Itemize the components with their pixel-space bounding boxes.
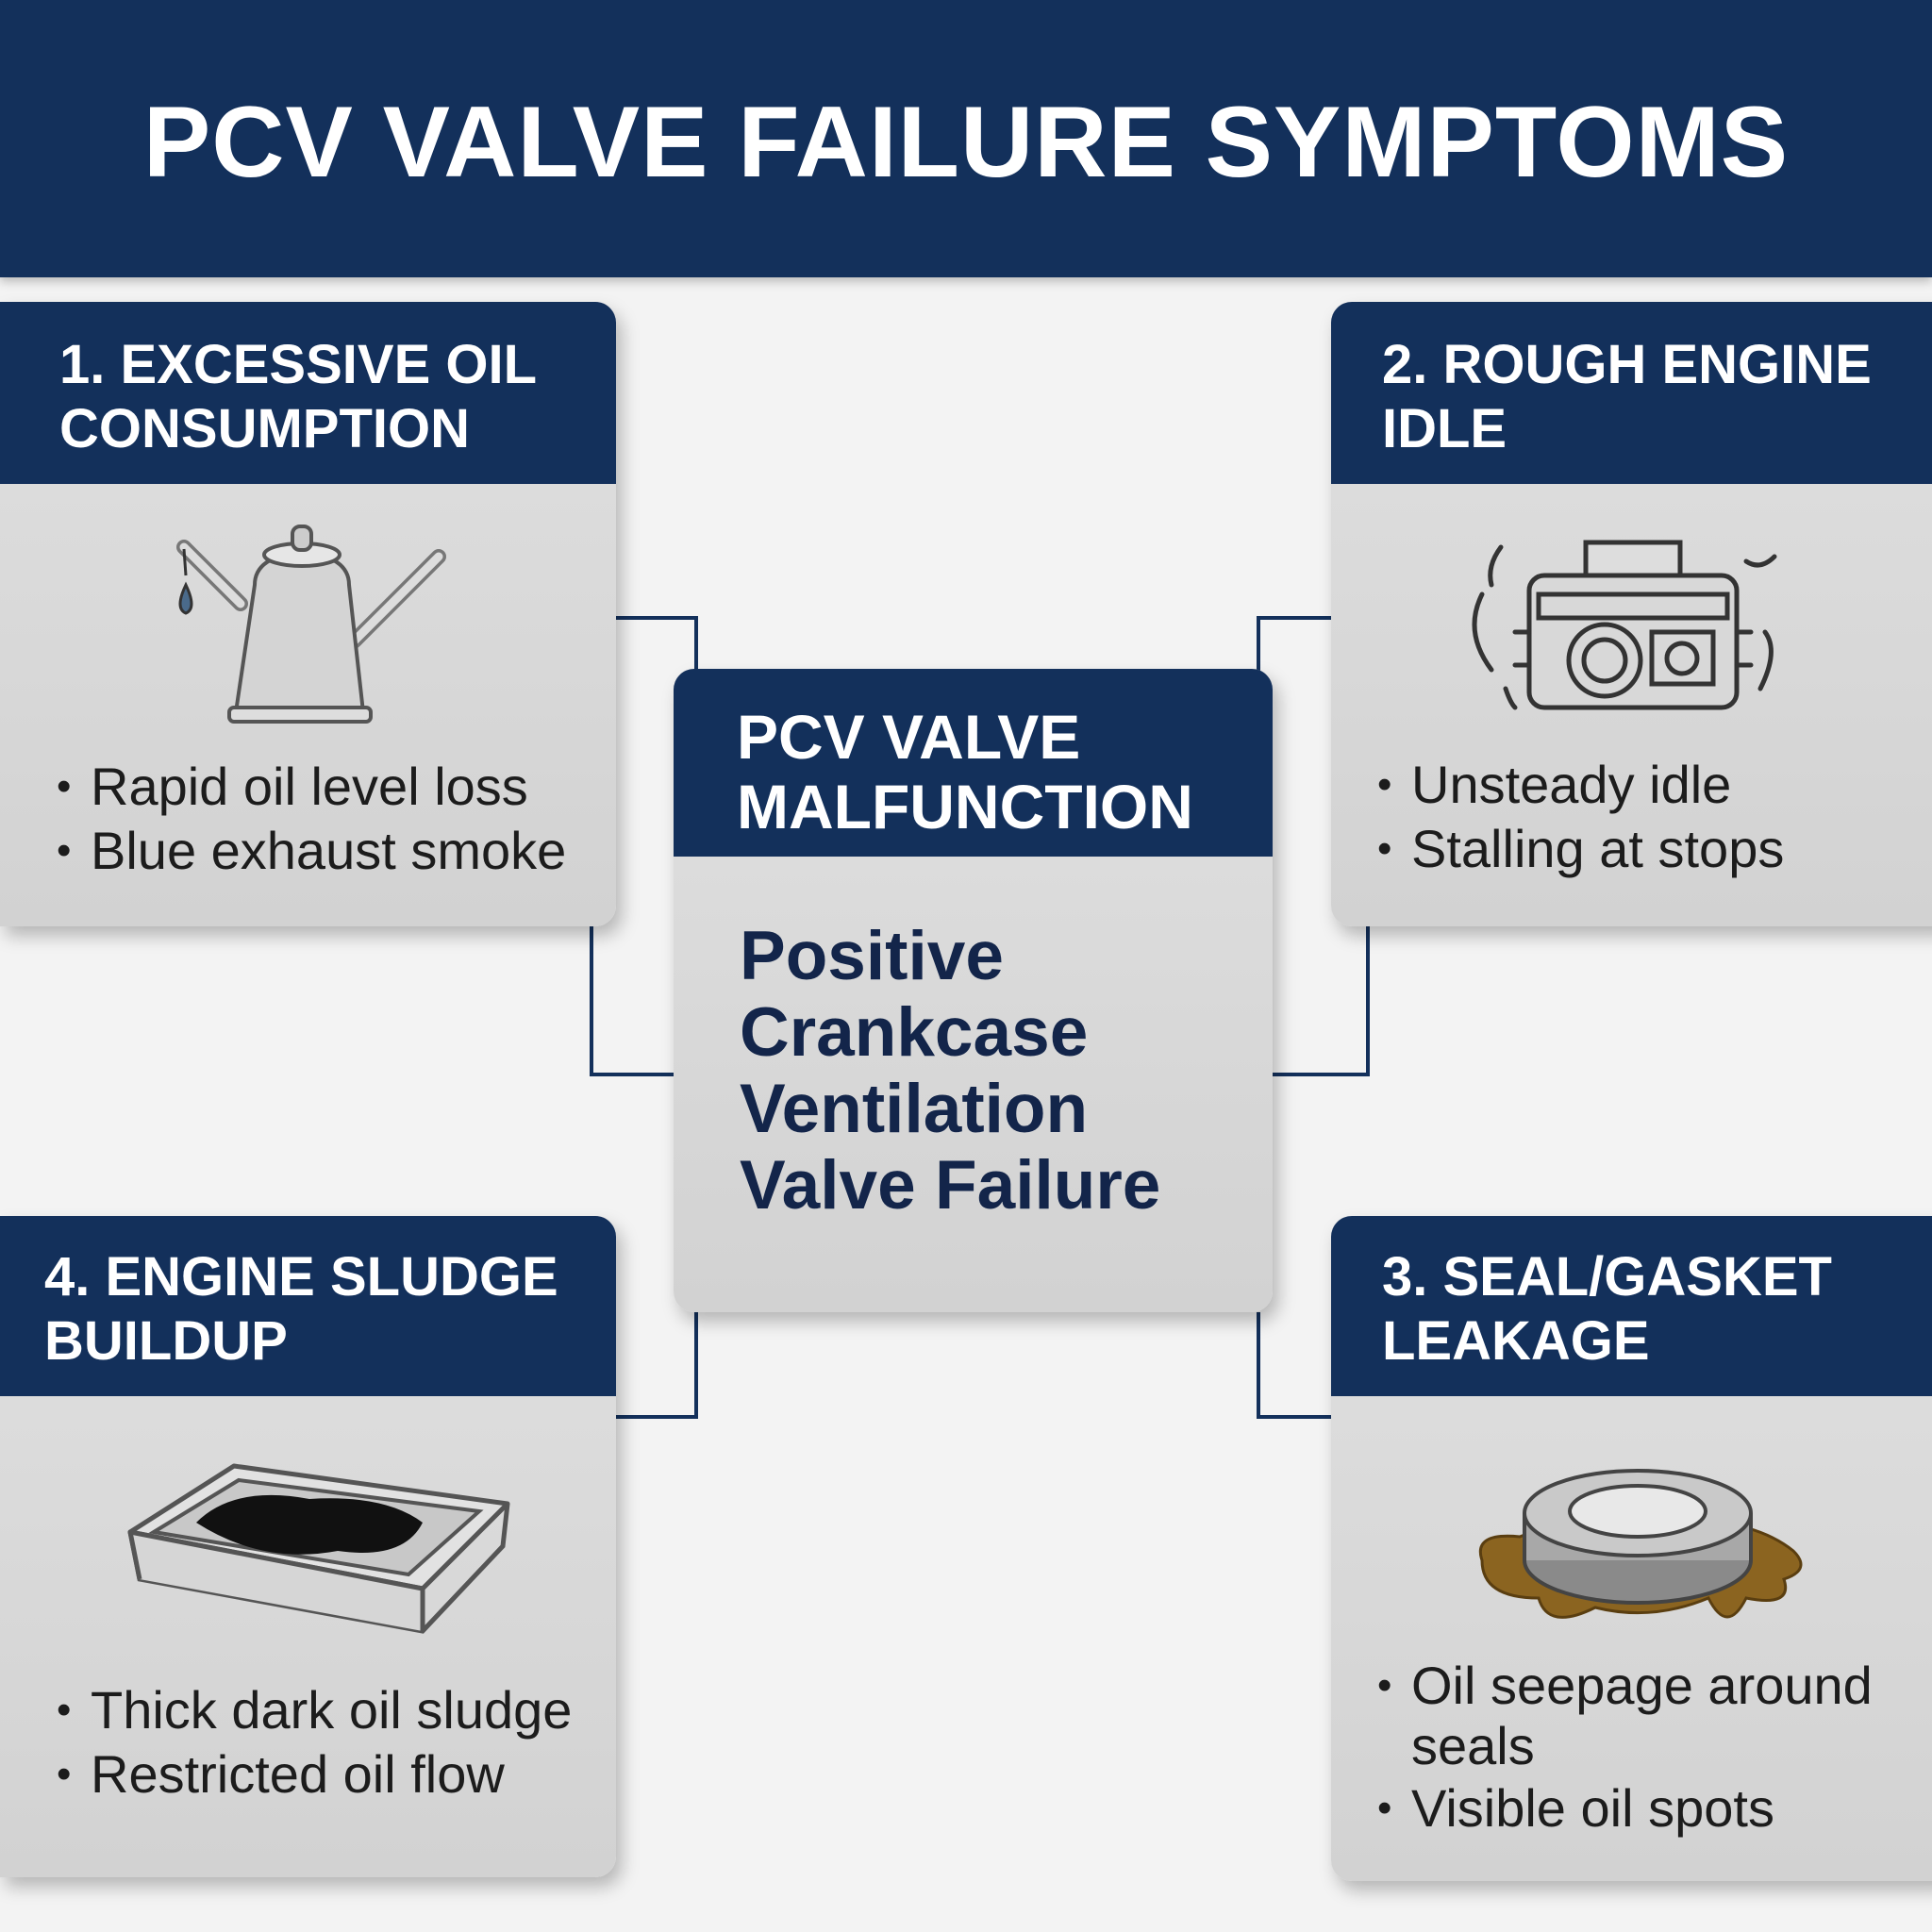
- center heading: PCV VALVE: [737, 702, 1080, 772]
- bullets: [1379, 1656, 1873, 1838]
- center heading: MALFUNCTION: [737, 772, 1193, 841]
- center body text: Valve Failure: [740, 1147, 1160, 1224]
- bullets: Thick dark oil sludge: [91, 1680, 572, 1740]
- panel: center PCV valve malfunction: [674, 669, 1273, 1312]
- bullets: Blue exhaust smoke: [91, 821, 566, 880]
- bullets: [1379, 755, 1784, 878]
- icon: oil pan with sludge: [128, 1464, 509, 1634]
- center body text: Ventilation: [740, 1071, 1088, 1147]
- center body text: Positive: [740, 918, 1004, 994]
- bullets: Stalling at stops: [1411, 819, 1784, 878]
- header banner: [0, 0, 1932, 277]
- bullets: Unsteady idle: [1411, 755, 1731, 814]
- heading 1: 1. EXCESSIVE OIL: [59, 334, 537, 395]
- center body text: Crankcase: [740, 994, 1088, 1071]
- panel: rough engine idle: [1331, 302, 1932, 926]
- bullets: Restricted oil flow: [91, 1744, 505, 1804]
- icon: oil can: [176, 525, 446, 724]
- heading 4: 4. ENGINE SLUDGE: [44, 1246, 558, 1307]
- center heading: [674, 669, 1273, 857]
- heading 3: [1331, 1216, 1932, 1396]
- heading 4: [0, 1216, 616, 1396]
- panel: seal/gasket leakage: [1331, 1216, 1932, 1881]
- heading 1: CONSUMPTION: [59, 398, 470, 459]
- heading 1: [0, 302, 616, 484]
- bullets: seals: [1411, 1716, 1535, 1775]
- heading 3: 3. SEAL/GASKET: [1382, 1246, 1832, 1307]
- icon: engine: [1472, 540, 1777, 709]
- heading 2: 2. ROUGH ENGINE: [1382, 334, 1872, 395]
- bullets: [58, 1680, 572, 1804]
- panel: engine sludge buildup: [0, 1216, 616, 1877]
- heading 2: [1331, 302, 1932, 484]
- panel: excessive oil consumption: [0, 302, 616, 926]
- heading 4: BUILDUP: [44, 1310, 288, 1372]
- heading 2: IDLE: [1382, 398, 1507, 459]
- title: PCV VALVE FAILURE SYMPTOMS: [143, 85, 1789, 198]
- bullets: Oil seepage around: [1411, 1656, 1873, 1715]
- heading 3: LEAKAGE: [1382, 1310, 1650, 1372]
- bullets: [58, 757, 566, 880]
- center body text: [740, 918, 1160, 1224]
- icon: leaking seal: [1479, 1469, 1802, 1619]
- bullets: Rapid oil level loss: [91, 757, 528, 816]
- bullets: Visible oil spots: [1411, 1778, 1774, 1838]
